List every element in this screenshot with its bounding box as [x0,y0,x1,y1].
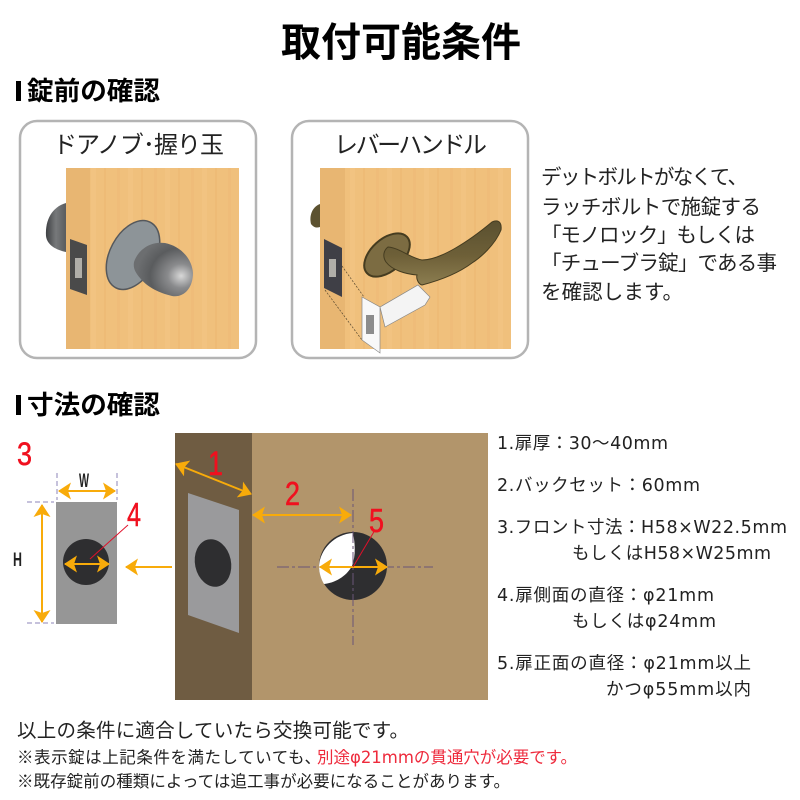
text block: note on indicator lock: 別途φ21mmの貫通穴が必要です。 [317,748,577,767]
text block: note on indicator lock: ※表示錠は上記条件を満たしていても、 [17,748,321,767]
text block: dimensions list: 3.フロント寸法：H58×W22.5mm [497,518,787,538]
callout: number 5: 5 [369,502,384,539]
diagram: door [175,433,488,700]
text block: dimensions list: かつφ55mm以内 [606,680,751,700]
door leaf [320,168,511,349]
label: W: W [79,471,89,492]
heading: dimension check: 寸法の確認 [27,390,160,420]
text block: conclusion: 以上の条件に適合していたら交換可能です。 [17,720,409,742]
heading: lock front check: 錠前の確認 [27,76,160,106]
text block: dimensions list: もしくはφ24mm [572,612,716,632]
arrow: door thickness [176,464,251,494]
text block: lock type explanation: を確認します。 [541,281,683,304]
label: lever handle: レバーハンドル [334,132,487,159]
center lines [277,489,433,645]
text block: dimensions list: 2.バックセット：60mm [497,476,700,496]
text block: lock type explanation [541,166,777,304]
latch plate [324,239,342,297]
text block: note on extra work: ※既存錠前の種類によっては追工事が必要になることがあります。 [17,772,510,791]
arrow: hole diameter [320,566,387,568]
door leaf [66,168,239,349]
rosette [356,225,418,285]
text block: dimensions list: 5.扉正面の直径：φ21mm以上 [497,654,751,674]
text block: dimensions list [497,434,787,700]
lever [384,221,501,285]
arrow: hole diameter [65,563,109,565]
door edge plate [188,493,239,633]
text block: dimensions list: もしくはH58×W25mm [572,544,771,564]
arrow: backset [253,514,351,516]
through hole [319,532,387,600]
text block: lock type explanation: 「モノロック」もしくは [541,224,755,247]
text block: dimensions list: 4.扉側面の直径：φ21mm [497,586,714,606]
latch mechanism [325,266,430,353]
text block: lock type explanation: ラッチボルトで施錠する [541,196,761,219]
label: number 3: 3 [17,436,32,472]
label: number 1: 1 [208,445,223,483]
label: number 2: 2 [285,475,300,512]
label: H: H [13,550,22,571]
text block: lock type explanation: 「チューブラ錠」である事 [541,251,777,275]
panel: lever handle [292,121,528,358]
latch plate [70,239,87,295]
callout: number 4: 4 [127,496,141,533]
title: 取付可能条件 [281,21,521,65]
diagram: front plate [13,436,141,624]
label: door knob: ドアノブ･握り玉 [53,132,224,159]
arrow: width [59,490,115,492]
text block: dimensions list: 1.扉厚：30～40mm [497,434,668,454]
callout: number 4 [90,496,141,559]
rear knob [46,203,66,252]
arrow: plate to front plate [126,566,172,568]
arrow: height [41,505,43,622]
panel: door knob [20,121,256,358]
callout: number 5 [353,502,384,567]
rear lever stub [310,204,320,228]
knob [95,212,193,298]
text block: lock type explanation: デットボルトがなくて、 [541,166,748,189]
text block: note on indicator lock [17,748,577,767]
